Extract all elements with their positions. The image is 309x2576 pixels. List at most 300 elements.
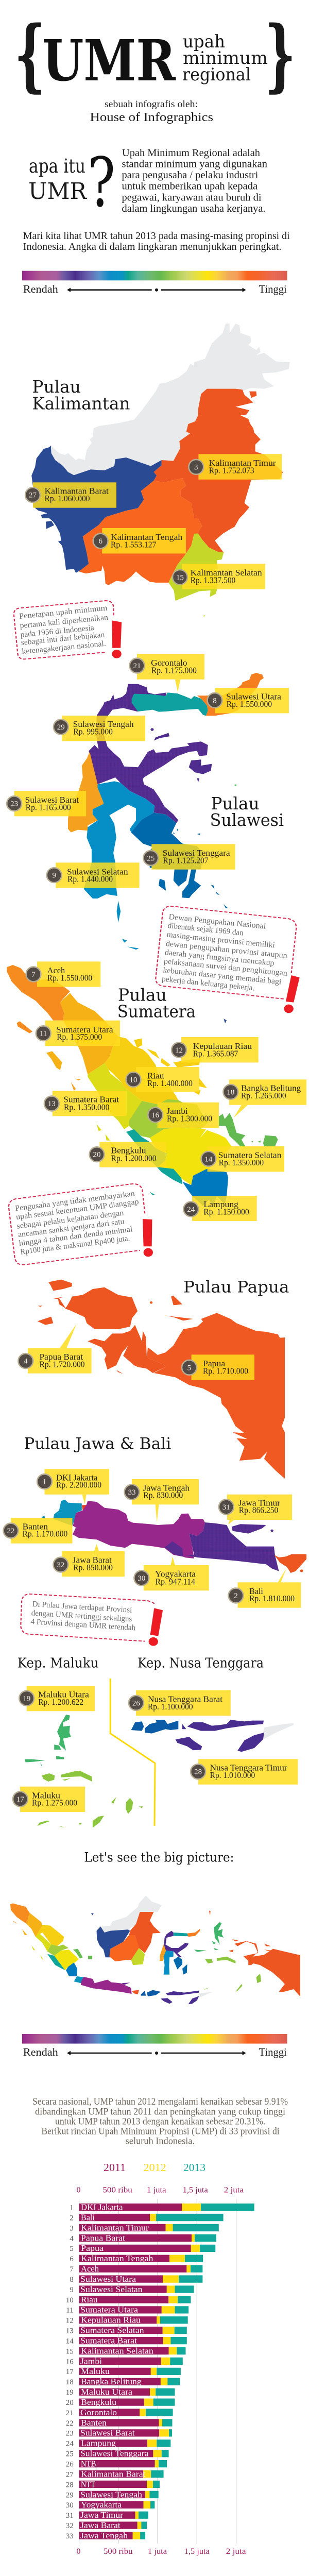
intro text: Mari kita lihat UMR tahun 2013 pada masing-masing propinsi di [23, 230, 290, 242]
axis bottom: 1 juta [148, 2547, 167, 2556]
region: Banggai islands [150, 728, 212, 774]
region: DKI Jakarta [82, 1505, 87, 1511]
label: Banten [4, 1518, 72, 1544]
callout: dewan pengupahan: pelaksanaan survei dan penghitungan [163, 957, 288, 978]
row 7 [70, 2264, 202, 2274]
definition text [122, 147, 267, 214]
row 24: 24 [66, 2440, 74, 2448]
label: Sumatera Utara [36, 1021, 120, 1046]
west islands [46, 1051, 62, 1070]
label: Jawa Timur: Rp. 866.250 [239, 1505, 278, 1515]
callout: pengusaha: sebagai pelaku kejahatan dengan [16, 1209, 124, 1231]
row 23: Sulawesi Barat [80, 2428, 135, 2438]
callout: Pulau Jawa: Di Pulau Jawa terdapat Provinsi [32, 1600, 132, 1615]
row 4: Papua Barat [81, 2233, 125, 2243]
callout: penetapan upah minimum: pertama kali diperkenalkan [20, 613, 109, 630]
label: Jawa Tengah [125, 1479, 199, 1522]
heading: apa itu UMR: ? [88, 143, 115, 223]
label: Kalimantan Tengah: Kalimantan Tengah [111, 532, 183, 542]
axis top: 0 [76, 2186, 80, 2195]
row 16: Jambi [80, 2356, 102, 2366]
axis top: 1 juta [147, 2186, 166, 2195]
row 27 [66, 2469, 164, 2479]
label: Sumatera Utara: Sumatera Utara [56, 1025, 113, 1035]
label: Nusa Tenggara Timur [191, 1759, 298, 1785]
map: Kalimantan Selatan [46, 521, 224, 617]
region: Timor Leste [248, 1723, 294, 1739]
label: DKI Jakarta: DKI Jakarta [56, 1472, 98, 1482]
left brace: { [14, 8, 45, 100]
label: Maluku Utara: Rp. 1.200.622 [38, 1697, 83, 1707]
region: Gorontalo [132, 692, 208, 716]
label: Sulawesi Tengah: 29 [57, 723, 65, 732]
label: Bengkulu: Rp. 1.200.000 [111, 1153, 157, 1163]
label: Sulawesi Tenggara: Sulawesi Tenggara [163, 848, 230, 858]
axis bottom: 2 juta [226, 2547, 246, 2556]
region: Nusa Tenggara Barat [131, 1720, 178, 1734]
row 15 [66, 2346, 185, 2355]
row 25: 25 [66, 2450, 74, 2459]
region: Sumatera Utara [60, 993, 118, 1074]
row 33: 33 [66, 2532, 74, 2540]
label: Papua: Rp. 1.710.000 [203, 1366, 248, 1376]
label: Gorontalo [130, 654, 204, 692]
label: Lampung: 24 [187, 1206, 195, 1214]
Kalimantan [97, 1895, 162, 1965]
definition text: untuk memberikan upah kepada [122, 181, 258, 192]
row 21: Gorontalo [80, 2408, 117, 2417]
axis bottom: 1,5 juta [184, 2547, 210, 2556]
axis bottom [76, 2547, 246, 2556]
row 29: Sulawesi Tengah [80, 2489, 143, 2499]
label: Jawa Barat [54, 1544, 125, 1577]
label: Kalimantan Barat: Rp. 1.060.000 [44, 494, 90, 503]
axis top: 500 ribu [102, 2186, 132, 2195]
map: Maluku & Nusa Tenggara [25, 1715, 294, 1828]
label: Sumatera Utara: Rp. 1.375.000 [57, 1032, 102, 1042]
row 5: Papua [81, 2243, 104, 2253]
label: Sulawesi Tengah: Sulawesi Tengah [73, 719, 134, 729]
label: Maluku [13, 1787, 85, 1812]
region: Bengkulu [126, 1129, 182, 1184]
title: UMR upah minimum regional [14, 8, 296, 100]
row 30: Yogyakarta [81, 2500, 122, 2510]
label: Yogyakarta [134, 1556, 209, 1590]
label: Papua [182, 1354, 254, 1380]
label: Kalimantan Selatan: Kalimantan Selatan [191, 568, 262, 578]
axis top: 2 juta [224, 2186, 244, 2195]
axis top: 1,5 juta [183, 2186, 208, 2195]
row 14 [66, 2336, 187, 2345]
label: Sumatera Selatan [201, 1146, 284, 1172]
map: Kalimantan [31, 324, 290, 585]
row 1 [70, 2202, 254, 2212]
label: Maluku Utara [19, 1686, 95, 1711]
label: Sumatera Barat: Sumatera Barat [63, 1095, 119, 1105]
row 27: Kalimantan Barat [81, 2469, 146, 2479]
row 9: 9 [70, 2286, 74, 2294]
row 15: Kalimantan Selatan [81, 2346, 153, 2355]
callout: pengusaha: hingga 4 tahun dan denda minimal [19, 1225, 133, 1248]
label: Lampung [183, 1196, 257, 1221]
title words: regional [182, 64, 251, 85]
row 20: Bengkulu [81, 2397, 116, 2407]
region: Banten [53, 1500, 82, 1526]
row 11 [66, 2305, 188, 2315]
chart legend: years: 2013 [183, 2161, 205, 2174]
row 13: 13 [66, 2327, 74, 2335]
definition text: dalam lingkungan usaha kerjanya. [122, 203, 266, 214]
region: Sulawesi Utara [197, 673, 264, 716]
label: Maluku: Maluku [32, 1790, 61, 1800]
row 5 [70, 2243, 215, 2253]
label: Riau: 10 [130, 1076, 137, 1084]
region: Papua [147, 1313, 285, 1479]
label: Kalimantan Tengah: 6 [98, 537, 102, 546]
definition text: Upah Minimum Regional adalah [122, 147, 260, 159]
text: national summary: untuk UMP tahun 2013 dengan kenaikan sebesar 20.31%. [55, 2116, 265, 2127]
label: Sulawesi Utara: Rp. 1.550.000 [227, 699, 272, 709]
label: Jawa Tengah: 33 [128, 1488, 136, 1497]
legend: colour scale top: Rendah [23, 283, 58, 295]
heading: apa itu UMR: apa itu [29, 155, 85, 177]
label: Bengkulu: Bengkulu [111, 1146, 146, 1156]
label: Jambi: Jambi [166, 1106, 188, 1116]
row 8: Sulawesi Utara [80, 2274, 136, 2284]
label: Papua Barat [18, 1324, 92, 1374]
row 1: 1 [70, 2204, 74, 2212]
row 8: 8 [70, 2276, 74, 2284]
icon: exclamation [143, 1219, 153, 1257]
row 31: 31 [66, 2512, 74, 2520]
callout: dewan pengupahan: daerah yang fungsinya mencakup [164, 948, 275, 968]
row 3 [70, 2223, 219, 2232]
callout: dewan pengupahan: dibentuk sejak 1969 dan [167, 921, 244, 938]
heading: Pulau Jawa & Bali: Pulau Jawa & Bali [24, 1435, 171, 1453]
row 7: Aceh [81, 2264, 99, 2274]
map: Papua [38, 1280, 285, 1479]
chart legend: years: 2011 [104, 2161, 126, 2174]
heading: Pulau Kalimantan: Pulau [32, 377, 81, 397]
row 7: 7 [70, 2265, 74, 2274]
icon: exclamation [284, 975, 300, 1013]
label: Sulawesi Barat: Sulawesi Barat [25, 795, 79, 805]
label: Sumatera Barat: 13 [48, 1100, 56, 1108]
heading: Pulau Kalimantan: Kalimantan [32, 394, 130, 414]
row 22 [66, 2418, 172, 2428]
text: national summary: Secara nasional, UMP tahun 2012 mengalami kenaikan sebesar 9.91% [32, 2097, 288, 2107]
row 8 [70, 2274, 202, 2284]
row 28: NTT [81, 2479, 95, 2489]
label: Jawa Tengah: Jawa Tengah [143, 1483, 190, 1493]
label: Banten: 22 [7, 1527, 14, 1535]
callout: pengusaha: ancaman sanksi penjara dari satu [18, 1217, 125, 1239]
definition text: pegawai, karyawan atau buruh di [122, 192, 262, 203]
axis bottom: 0 [76, 2547, 80, 2556]
label: Papua Barat: Rp. 1.720.000 [39, 1359, 84, 1369]
region: Nusa Tenggara Timur [176, 1720, 264, 1750]
row 33: Jawa Tengah [80, 2531, 128, 2540]
label: Jambi: Rp. 1.300.000 [167, 1113, 212, 1123]
label: Aceh: Aceh [47, 965, 65, 975]
label: Sumatera Barat [44, 1091, 127, 1116]
region: Yogyakarta [165, 1541, 183, 1557]
row 33 [66, 2531, 145, 2540]
row 3: Kalimantan Timur [81, 2223, 149, 2232]
region: Jambi [129, 1099, 209, 1138]
label: Sulawesi Selatan: Sulawesi Selatan [67, 867, 128, 876]
label: DKI Jakarta [37, 1469, 109, 1504]
label: Nusa Tenggara Barat: Rp. 1.100.000 [148, 1702, 193, 1711]
label: Bali [229, 1568, 301, 1608]
callout: dewan pengupahan: masing-masing provinsi memiliki [166, 930, 276, 950]
text: national summary [32, 2097, 288, 2147]
region: Bangka Belitung [219, 1113, 278, 1146]
label: Yogyakarta: Yogyakarta [155, 1569, 196, 1579]
row 4 [70, 2233, 216, 2243]
label: Bangka Belitung: 18 [227, 1088, 234, 1096]
heading: Kep. Nusa Tenggara: Kep. Nusa Tenggara [138, 1655, 264, 1671]
row 2 [70, 2212, 224, 2222]
callout: penetapan upah minimum: sebagai inti dari kebijakan [21, 630, 105, 647]
text: national summary: seluruh Indonesia. [126, 2137, 195, 2147]
row 30: 30 [66, 2501, 74, 2510]
row 24: Lampung [81, 2438, 116, 2448]
heading: Pulau Sulawesi: Sulawesi [210, 810, 284, 830]
label: Sulawesi Selatan [47, 862, 140, 888]
label: Aceh [26, 961, 100, 987]
Papua [209, 1910, 300, 1996]
row 25 [66, 2449, 169, 2459]
callout: pengusaha: upah sesuai ketentuan UMP dianggap [15, 1197, 140, 1222]
label: Riau: Rp. 1.400.000 [147, 1078, 193, 1088]
label: Nusa Tenggara Barat: Nusa Tenggara Barat [148, 1694, 222, 1704]
region: Lampung [182, 1169, 228, 1207]
region: Papua Barat [38, 1280, 193, 1374]
heading: big picture: Let's see the big picture: [84, 1850, 234, 1865]
label: Maluku: Rp. 1.275.000 [32, 1798, 77, 1808]
region: Sulawesi Tengah [89, 684, 208, 823]
label: Riau: Riau [147, 1071, 164, 1081]
label: Sulawesi Utara: Sulawesi Utara [226, 692, 281, 702]
row 28 [66, 2479, 160, 2489]
legend: colour scale bottom: Tinggi [259, 2046, 287, 2058]
label: Kalimantan Selatan: 15 [176, 573, 184, 582]
label: Kepulauan Riau: Rp. 1.365.087 [193, 1048, 238, 1058]
row 10: Riau [81, 2295, 98, 2304]
label: Jawa Tengah: Rp. 830.000 [143, 1490, 183, 1500]
label: Jawa Barat: Rp. 850.000 [73, 1563, 113, 1572]
label: Sumatera Selatan: 14 [204, 1155, 213, 1163]
row 18: 18 [66, 2378, 74, 2386]
label: Sumatera Selatan: Rp. 1.350.000 [219, 1158, 264, 1167]
region: Maluku [38, 1771, 143, 1828]
label: Maluku: 17 [16, 1795, 24, 1804]
big UMR: UMR [42, 27, 176, 94]
row 12: 12 [66, 2317, 74, 2325]
callout: Pulau Jawa: 4 Provinsi dengan UMR terendah [30, 1617, 136, 1632]
definition text: para pengusaha / pelaku industri [122, 170, 259, 181]
label: Kalimantan Timur: 3 [194, 463, 198, 471]
row 19: Maluku Utara [81, 2387, 133, 2397]
label: Nusa Tenggara Timur: 28 [194, 1768, 202, 1776]
label: Gorontalo: 21 [133, 662, 141, 670]
intro text: Indonesia. Angka di dalam lingkaran menunjukkan peringkat. [23, 241, 282, 252]
label: Nusa Tenggara Timur: Rp. 1.010.000 [210, 1770, 255, 1780]
region: Riau & Kepri [105, 1037, 207, 1105]
row 11: 11 [66, 2307, 74, 2315]
region: Kalimantan Tengah [79, 478, 202, 585]
Sumatera [10, 1903, 94, 1976]
islands [117, 901, 139, 950]
definition text: standar minimum yang digunakan [122, 158, 267, 170]
region: Kalimantan Timur [154, 389, 283, 553]
label: Maluku Utara: 19 [23, 1694, 30, 1703]
row 17 [66, 2366, 181, 2376]
label: Jawa Timur [219, 1495, 292, 1524]
callout: pengusaha [9, 1184, 153, 1265]
label: Kalimantan Selatan [173, 564, 265, 589]
label: Kalimantan Tengah [93, 528, 186, 553]
map: Indonesia overview [10, 1895, 300, 2004]
label: Kalimantan Timur: Rp. 1.752.073 [209, 466, 254, 476]
region: Sulawesi Barat [68, 752, 104, 833]
row 3: 3 [70, 2224, 74, 2232]
label: Yogyakarta: Rp. 947.114 [156, 1577, 195, 1586]
legend: colour scale top: Tinggi [259, 283, 287, 295]
row 19 [66, 2387, 175, 2397]
map: Sulawesi north and centre [68, 673, 264, 833]
Maluku [194, 1922, 261, 1992]
row 10 [66, 2295, 191, 2304]
row 4: 4 [70, 2234, 74, 2243]
label: Nusa Tenggara Timur: Nusa Tenggara Timur [210, 1763, 287, 1773]
row 26 [66, 2459, 167, 2469]
row 17: 17 [66, 2368, 74, 2376]
callout: dewan pengupahan [156, 906, 300, 1013]
byline [90, 99, 213, 124]
row 21 [66, 2408, 173, 2417]
label: Kalimantan Timur: Kalimantan Timur [209, 458, 276, 468]
label: Sumatera Selatan: Sumatera Selatan [218, 1150, 282, 1160]
callout: dewan pengupahan: Dewan Pengupahan Nasional [168, 912, 266, 931]
intro text [23, 230, 290, 252]
label: Sumatera Utara: 11 [40, 1030, 47, 1038]
row 32: Jawa Barat [80, 2520, 121, 2530]
row 29: 29 [66, 2491, 74, 2499]
label: Kepulauan Riau: 12 [175, 1046, 183, 1055]
region: Jawa Timur [185, 1522, 279, 1571]
legend: colour scale bottom [22, 2034, 287, 2058]
chart legend: years: 2012 [144, 2161, 166, 2174]
label: Bengkulu: 20 [93, 1151, 101, 1159]
label: Sulawesi Tenggara: Rp. 1.125.207 [163, 856, 209, 866]
row 31: Jawa Timur [80, 2510, 124, 2520]
title words: upah [183, 31, 225, 52]
row 19: 19 [66, 2388, 74, 2397]
row 21: 21 [66, 2409, 74, 2417]
row 28: 28 [66, 2481, 74, 2489]
text: national summary: dibandingkan UMP tahun 2011 dan peningkatan yang cukup tinggi [35, 2107, 285, 2117]
label: Lampung: Lampung [203, 1199, 239, 1209]
label: Kepulauan Riau [171, 1037, 259, 1062]
label: Kalimantan Barat: Kalimantan Barat [44, 486, 109, 496]
row 20 [66, 2397, 175, 2407]
label: Kalimantan Timur [188, 454, 282, 480]
map: Jawa & Bali [41, 1500, 306, 1573]
row 32 [66, 2520, 147, 2530]
row 2: Bali [81, 2212, 95, 2222]
row 16: 16 [66, 2358, 74, 2366]
text: national summary: Berikut rincian Upah Minimum Propinsi (UMP) di 33 provinsi di [41, 2127, 280, 2137]
title words [182, 31, 268, 85]
callout: dewan pengupahan: pekerja dan keluarga pekerja. [161, 975, 255, 992]
label: Sulawesi Barat: 23 [10, 800, 18, 808]
callout: pengusaha: Pengusaha yang tidak membayarkan [14, 1189, 135, 1213]
label: Banten: Rp. 1.170.000 [23, 1529, 67, 1539]
row 2: 2 [70, 2214, 74, 2222]
label: Sulawesi Tenggara [143, 844, 235, 870]
row 11: Sumatera Utara [80, 2305, 139, 2315]
label: Sulawesi Tenggara: 25 [147, 854, 154, 862]
label: Kalimantan Barat: 27 [29, 492, 37, 500]
label: Bangka Belitung: Bangka Belitung [241, 1083, 301, 1093]
label: Kalimantan Tengah: Rp. 1.553.127 [111, 540, 157, 550]
label: Gorontalo: Gorontalo [151, 658, 187, 668]
map: Sumatera north [7, 965, 227, 1033]
region: Aceh [7, 965, 70, 1021]
label: Lampung: Rp. 1.150.000 [203, 1207, 249, 1216]
callout: Pulau Jawa: dengan UMR tertinggi sekaligus [31, 1608, 132, 1623]
row 17: Maluku [81, 2366, 110, 2376]
label: Bali: Rp. 1.810.000 [249, 1594, 295, 1603]
axis bottom: 500 ribu [104, 2547, 133, 2556]
Jawa, Bali, Nusa Tenggara [74, 1976, 213, 2004]
callout: penetapan upah minimum: ketenagakerjaan nasional. [22, 639, 107, 656]
label: Kepulauan Riau: Kepulauan Riau [193, 1041, 252, 1051]
row 25: Sulawesi Tenggara [80, 2449, 149, 2459]
row 14: 14 [66, 2337, 74, 2345]
row 10: 10 [66, 2296, 74, 2304]
label: Sulawesi Utara [208, 688, 289, 713]
label: Sulawesi Barat [7, 791, 86, 816]
callout: penetapan upah minimum: Penetapan upah minimum [19, 604, 108, 621]
row 18: Bangka Belitung [81, 2377, 141, 2386]
row 13 [66, 2326, 187, 2335]
region: Sulawesi Selatan [84, 781, 154, 899]
row 26: 26 [66, 2461, 74, 2469]
row 23: 23 [66, 2430, 74, 2438]
label: Bengkulu [90, 1142, 166, 1167]
row 18 [66, 2377, 180, 2386]
row 14: Sumatera Barat [80, 2336, 137, 2345]
axis top [76, 2186, 244, 2195]
row 24 [66, 2438, 170, 2448]
region: Sumatera Barat [88, 1063, 148, 1129]
row 13: Sumatera Selatan [80, 2326, 144, 2335]
label: Yogyakarta: 30 [138, 1574, 145, 1583]
row 6 [70, 2253, 203, 2263]
label: Sumatera Barat: Rp. 1.350.000 [64, 1102, 109, 1112]
label: Sulawesi Tengah [54, 716, 145, 741]
heading: apa itu UMR: UMR [28, 178, 88, 205]
label: Bangka Belitung [223, 1079, 306, 1118]
row 6: 6 [70, 2255, 74, 2263]
label: DKI Jakarta: 1 [43, 1478, 46, 1486]
bar chart: UMP by province [66, 2186, 254, 2556]
row 22: Banten [81, 2418, 107, 2428]
map: Sumatera south [46, 993, 278, 1207]
